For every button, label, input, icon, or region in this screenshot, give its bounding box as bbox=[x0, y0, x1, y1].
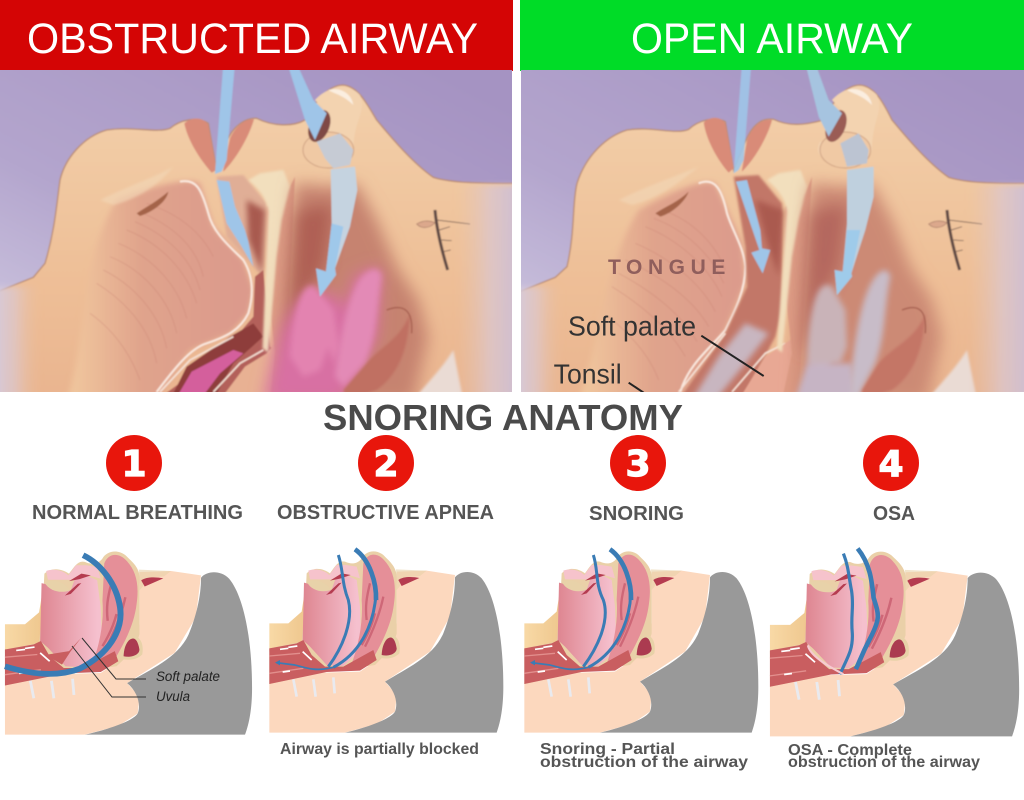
open airway and throat tissue bbox=[679, 170, 812, 400]
caption: diagram 3 bbox=[540, 741, 748, 771]
header: obstructed airway bbox=[0, 0, 513, 71]
side fades bbox=[521, 284, 554, 392]
caption: diagram 3: Snoring - Partial bbox=[540, 741, 675, 758]
face silhouette bbox=[515, 85, 1024, 400]
step 3 heading: SNORING bbox=[589, 503, 684, 525]
step 2 badge bbox=[358, 435, 414, 491]
step 3 badge bbox=[610, 435, 666, 491]
label: soft palate: Soft palate bbox=[156, 669, 220, 684]
panel: obstructed airway illustration bbox=[0, 63, 523, 403]
header: obstructed airway: OBSTRUCTED AIRWAY bbox=[27, 15, 478, 63]
step 2 badge: 2 bbox=[373, 444, 399, 485]
label: tongue: TONGUE bbox=[608, 256, 725, 279]
nose bbox=[818, 87, 879, 168]
airway and throat tissue bbox=[157, 170, 295, 400]
face silhouette bbox=[0, 85, 520, 400]
label: tonsil: Tonsil bbox=[554, 358, 622, 389]
caption: diagram 2: Airway is partially blocked bbox=[280, 741, 479, 758]
caption: diagram 4: obstruction of the airway bbox=[788, 754, 980, 771]
step 1 badge bbox=[106, 435, 162, 491]
arrow: nose airflow bbox=[805, 63, 874, 295]
nasal passage and pharynx bbox=[263, 183, 463, 403]
step 2 heading: OBSTRUCTIVE APNEA bbox=[277, 502, 494, 524]
diagram 4: osa bbox=[770, 548, 1019, 736]
label: soft palate: Soft palate bbox=[568, 310, 696, 341]
label: uvula: Uvula bbox=[156, 689, 190, 704]
step 1 badge: 1 bbox=[121, 444, 147, 485]
title: SNORING ANATOMY bbox=[323, 397, 683, 438]
caption: diagram 4 bbox=[788, 742, 980, 771]
side fades bbox=[0, 284, 32, 392]
label: soft palate bbox=[568, 310, 764, 376]
panel: open airway illustration bbox=[512, 63, 1024, 403]
tongue bbox=[579, 167, 745, 400]
nose bbox=[303, 87, 362, 168]
arrow: mouth airflow bbox=[734, 63, 770, 273]
nasal passage and pharynx bbox=[795, 183, 977, 403]
caption: diagram 3: obstruction of the airway bbox=[540, 754, 748, 771]
arrow: nose airflow bbox=[287, 63, 357, 297]
diagram 1: normal breathing bbox=[5, 551, 252, 735]
caption: diagram 4: OSA - Complete bbox=[788, 742, 912, 759]
header: open airway: OPEN AIRWAY bbox=[631, 15, 913, 63]
ear bbox=[417, 210, 470, 270]
ear bbox=[929, 210, 982, 270]
label: tonsil bbox=[554, 364, 644, 392]
lips bbox=[184, 119, 254, 173]
diagram 3: snoring bbox=[524, 549, 758, 733]
arrow: mouth airflow bbox=[215, 63, 253, 267]
tongue bbox=[67, 167, 253, 400]
lips bbox=[704, 118, 772, 173]
step 3 badge: 3 bbox=[625, 444, 651, 485]
header: open airway bbox=[520, 0, 1024, 71]
step 4 badge: 4 bbox=[878, 444, 904, 485]
step 4 heading: OSA bbox=[873, 503, 915, 525]
diagram 2: obstructive apnea bbox=[269, 549, 503, 733]
step 4 badge bbox=[863, 435, 919, 491]
callout lines bbox=[72, 638, 146, 697]
step 1 heading: NORMAL BREATHING bbox=[32, 502, 243, 524]
